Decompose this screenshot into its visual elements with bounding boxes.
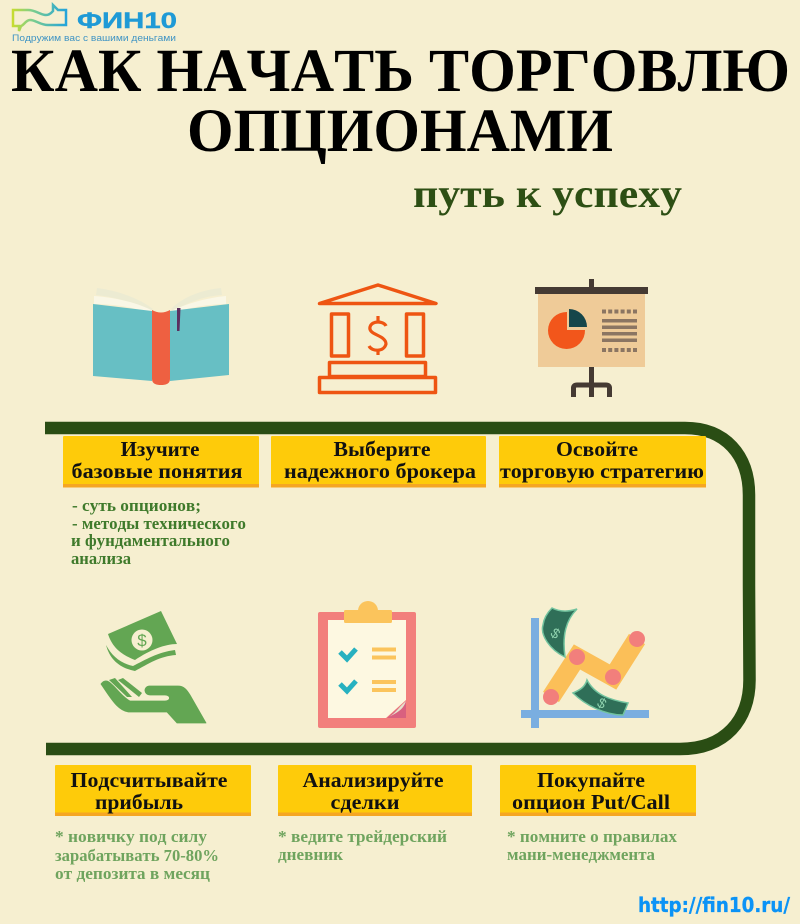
panel: step 1: базовые понятия [72,459,243,483]
icon: open book [93,288,229,385]
text block: step 4 notes: * новичку под силу [55,827,208,846]
panel: step 6 [500,765,696,816]
logo: ФИН10: ФИН10 [77,8,177,33]
icon: clipboard [318,601,416,728]
text block: step 5 notes [278,827,448,864]
logo: ФИН10 [12,5,177,43]
panel: step 5: сделки [330,790,400,814]
panel: step 2: надежного брокера [284,459,477,483]
panel: step 1 [63,436,259,488]
panel: step 5 [278,765,472,816]
text block: step 4 notes: от депозита в месяц [55,864,211,883]
text block: step 6 notes: * помните о правилах [507,827,678,846]
panel: step 6: Покупайте [537,768,645,792]
panel: step 3: Освойте [556,437,638,461]
panel: step 5: Анализируйте [302,768,444,792]
text block: step 1 notes: - суть опционов; [72,496,201,515]
icon: money and hand [101,611,206,723]
text block: step 6 notes [507,827,678,864]
subtitle: путь к успеху [413,171,682,216]
text block: step 1 notes [71,496,246,568]
panel: step 2: Выберите [334,437,430,461]
panel: step 4: прибыль [95,790,183,814]
website link: http://fin10.ru/ [638,893,791,917]
text block: step 4 notes: зарабатывать 70-80% [55,846,219,865]
panel: step 1: Изучите [121,437,199,461]
text block: step 1 notes: - методы технического [72,514,246,533]
panel: step 3: торговую стратегию [500,459,704,483]
icon: chart with money [521,608,649,728]
panel: step 4: Подсчитывайте [70,768,228,792]
arrow: track path [45,428,750,749]
text block: step 5 notes: * ведите трейдерский [278,827,448,846]
title: ОПЦИОНАМИ [187,98,613,165]
text block: step 5 notes: дневник [278,845,344,864]
title: КАК НАЧАТЬ ТОРГОВЛЮ [11,38,790,105]
text block: step 1 notes: анализа [71,549,131,568]
logo: ФИН10: Подружим вас с вашими деньгами [12,33,176,43]
icon: money and hand: $ [137,631,147,650]
icon: presentation board [535,279,648,397]
text block: step 1 notes: и фундаментального [71,531,230,550]
panel: step 2 [271,436,486,488]
panel: step 6: опцион Put/Call [512,790,670,814]
text block: step 6 notes: мани-менеджмента [507,845,655,864]
icon: chart with money: $ [595,694,610,712]
title [11,38,790,165]
icon: bank [320,285,436,392]
icon: chart with money: $ [548,624,564,642]
text block: step 4 notes [55,827,219,883]
panel: step 4 [55,765,251,816]
panel: step 3 [499,436,706,488]
